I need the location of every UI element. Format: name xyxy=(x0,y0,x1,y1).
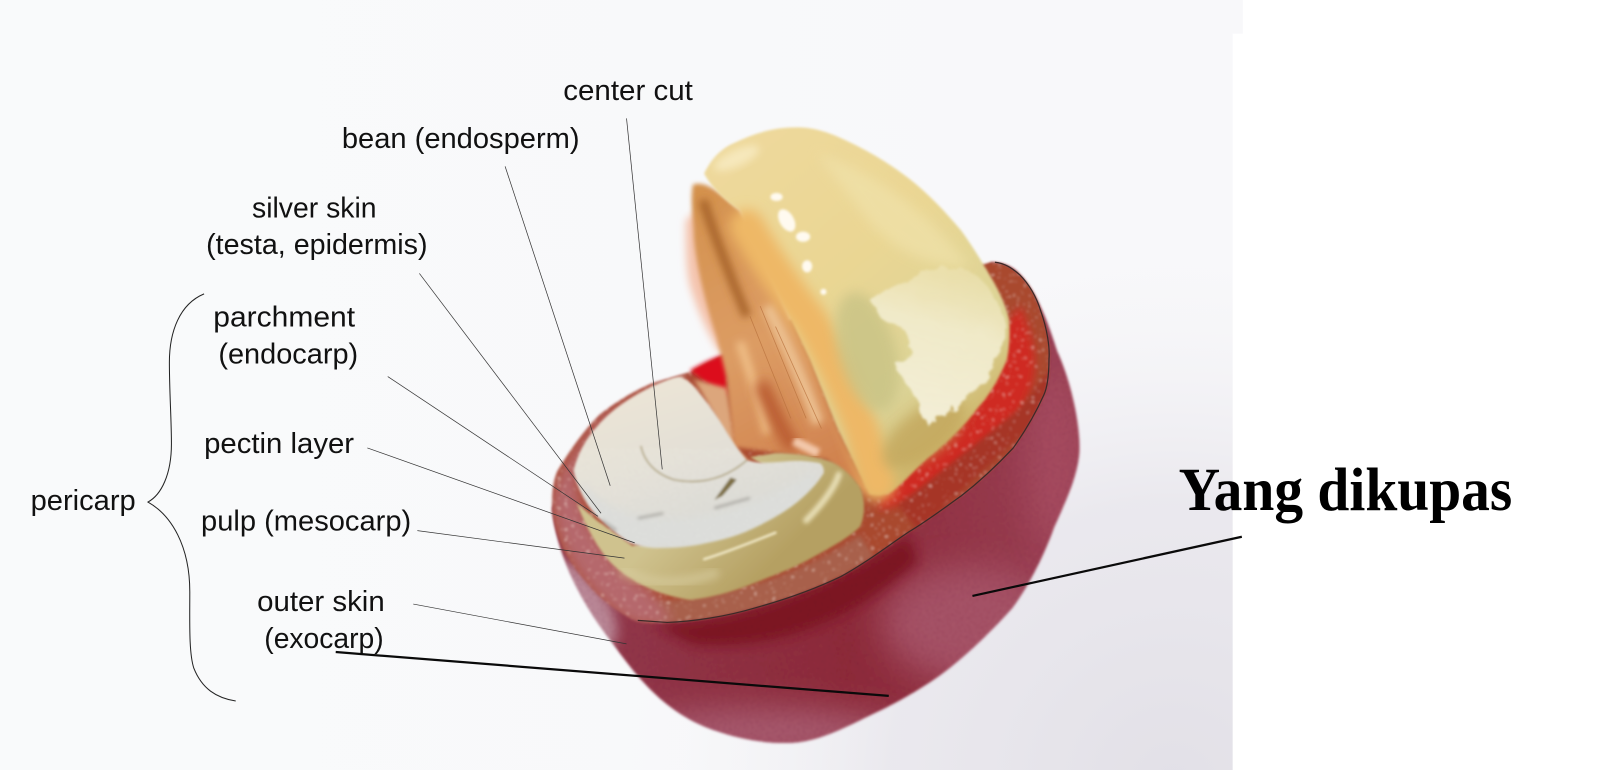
labels: (endocarp) xyxy=(218,338,358,370)
leader lines xyxy=(367,118,662,644)
callout line to heading xyxy=(972,537,1242,596)
labels: (testa, epidermis) xyxy=(206,229,428,261)
labels: (exocarp) xyxy=(264,623,384,655)
labels xyxy=(31,75,693,655)
labels: center cut xyxy=(563,75,693,107)
cut rim flesh xyxy=(541,255,1061,633)
labels: silver skin xyxy=(252,192,377,224)
pale pink torn pulp behind bean xyxy=(686,204,733,352)
peach flesh beside cut bean xyxy=(694,380,753,465)
greenish centre of bean xyxy=(824,286,911,419)
torn fibrous bean wall xyxy=(692,184,867,494)
crack lines xyxy=(641,446,747,481)
labels: outer skin xyxy=(257,586,385,618)
pale upper right of bean xyxy=(816,153,969,267)
coffee cherry cross-section xyxy=(531,127,1102,757)
gloss highlights xyxy=(770,193,827,295)
olive lower bean xyxy=(871,386,976,482)
pulp highlights xyxy=(624,474,839,582)
pericarp curly brace xyxy=(148,294,236,701)
labels: pectin layer xyxy=(204,428,355,460)
cut bean face xyxy=(566,372,832,551)
pulp band xyxy=(577,453,864,600)
rim dark edge xyxy=(638,262,1049,622)
outer skin xyxy=(550,260,1082,745)
labels: parchment xyxy=(213,302,355,334)
standing half bean xyxy=(704,127,1010,495)
photo background xyxy=(0,0,1243,770)
white patch on bean xyxy=(873,267,1006,424)
left rim tint xyxy=(552,369,692,624)
callout heading: Yang dikupas xyxy=(1179,456,1512,524)
callout line to exocarp xyxy=(336,652,889,696)
red pool behind cut bean xyxy=(690,353,729,396)
labels: bean (endosperm) xyxy=(342,123,580,155)
labels: pulp (mesocarp) xyxy=(201,506,411,538)
labels: pericarp xyxy=(31,485,136,517)
orange band on bean xyxy=(747,227,878,484)
